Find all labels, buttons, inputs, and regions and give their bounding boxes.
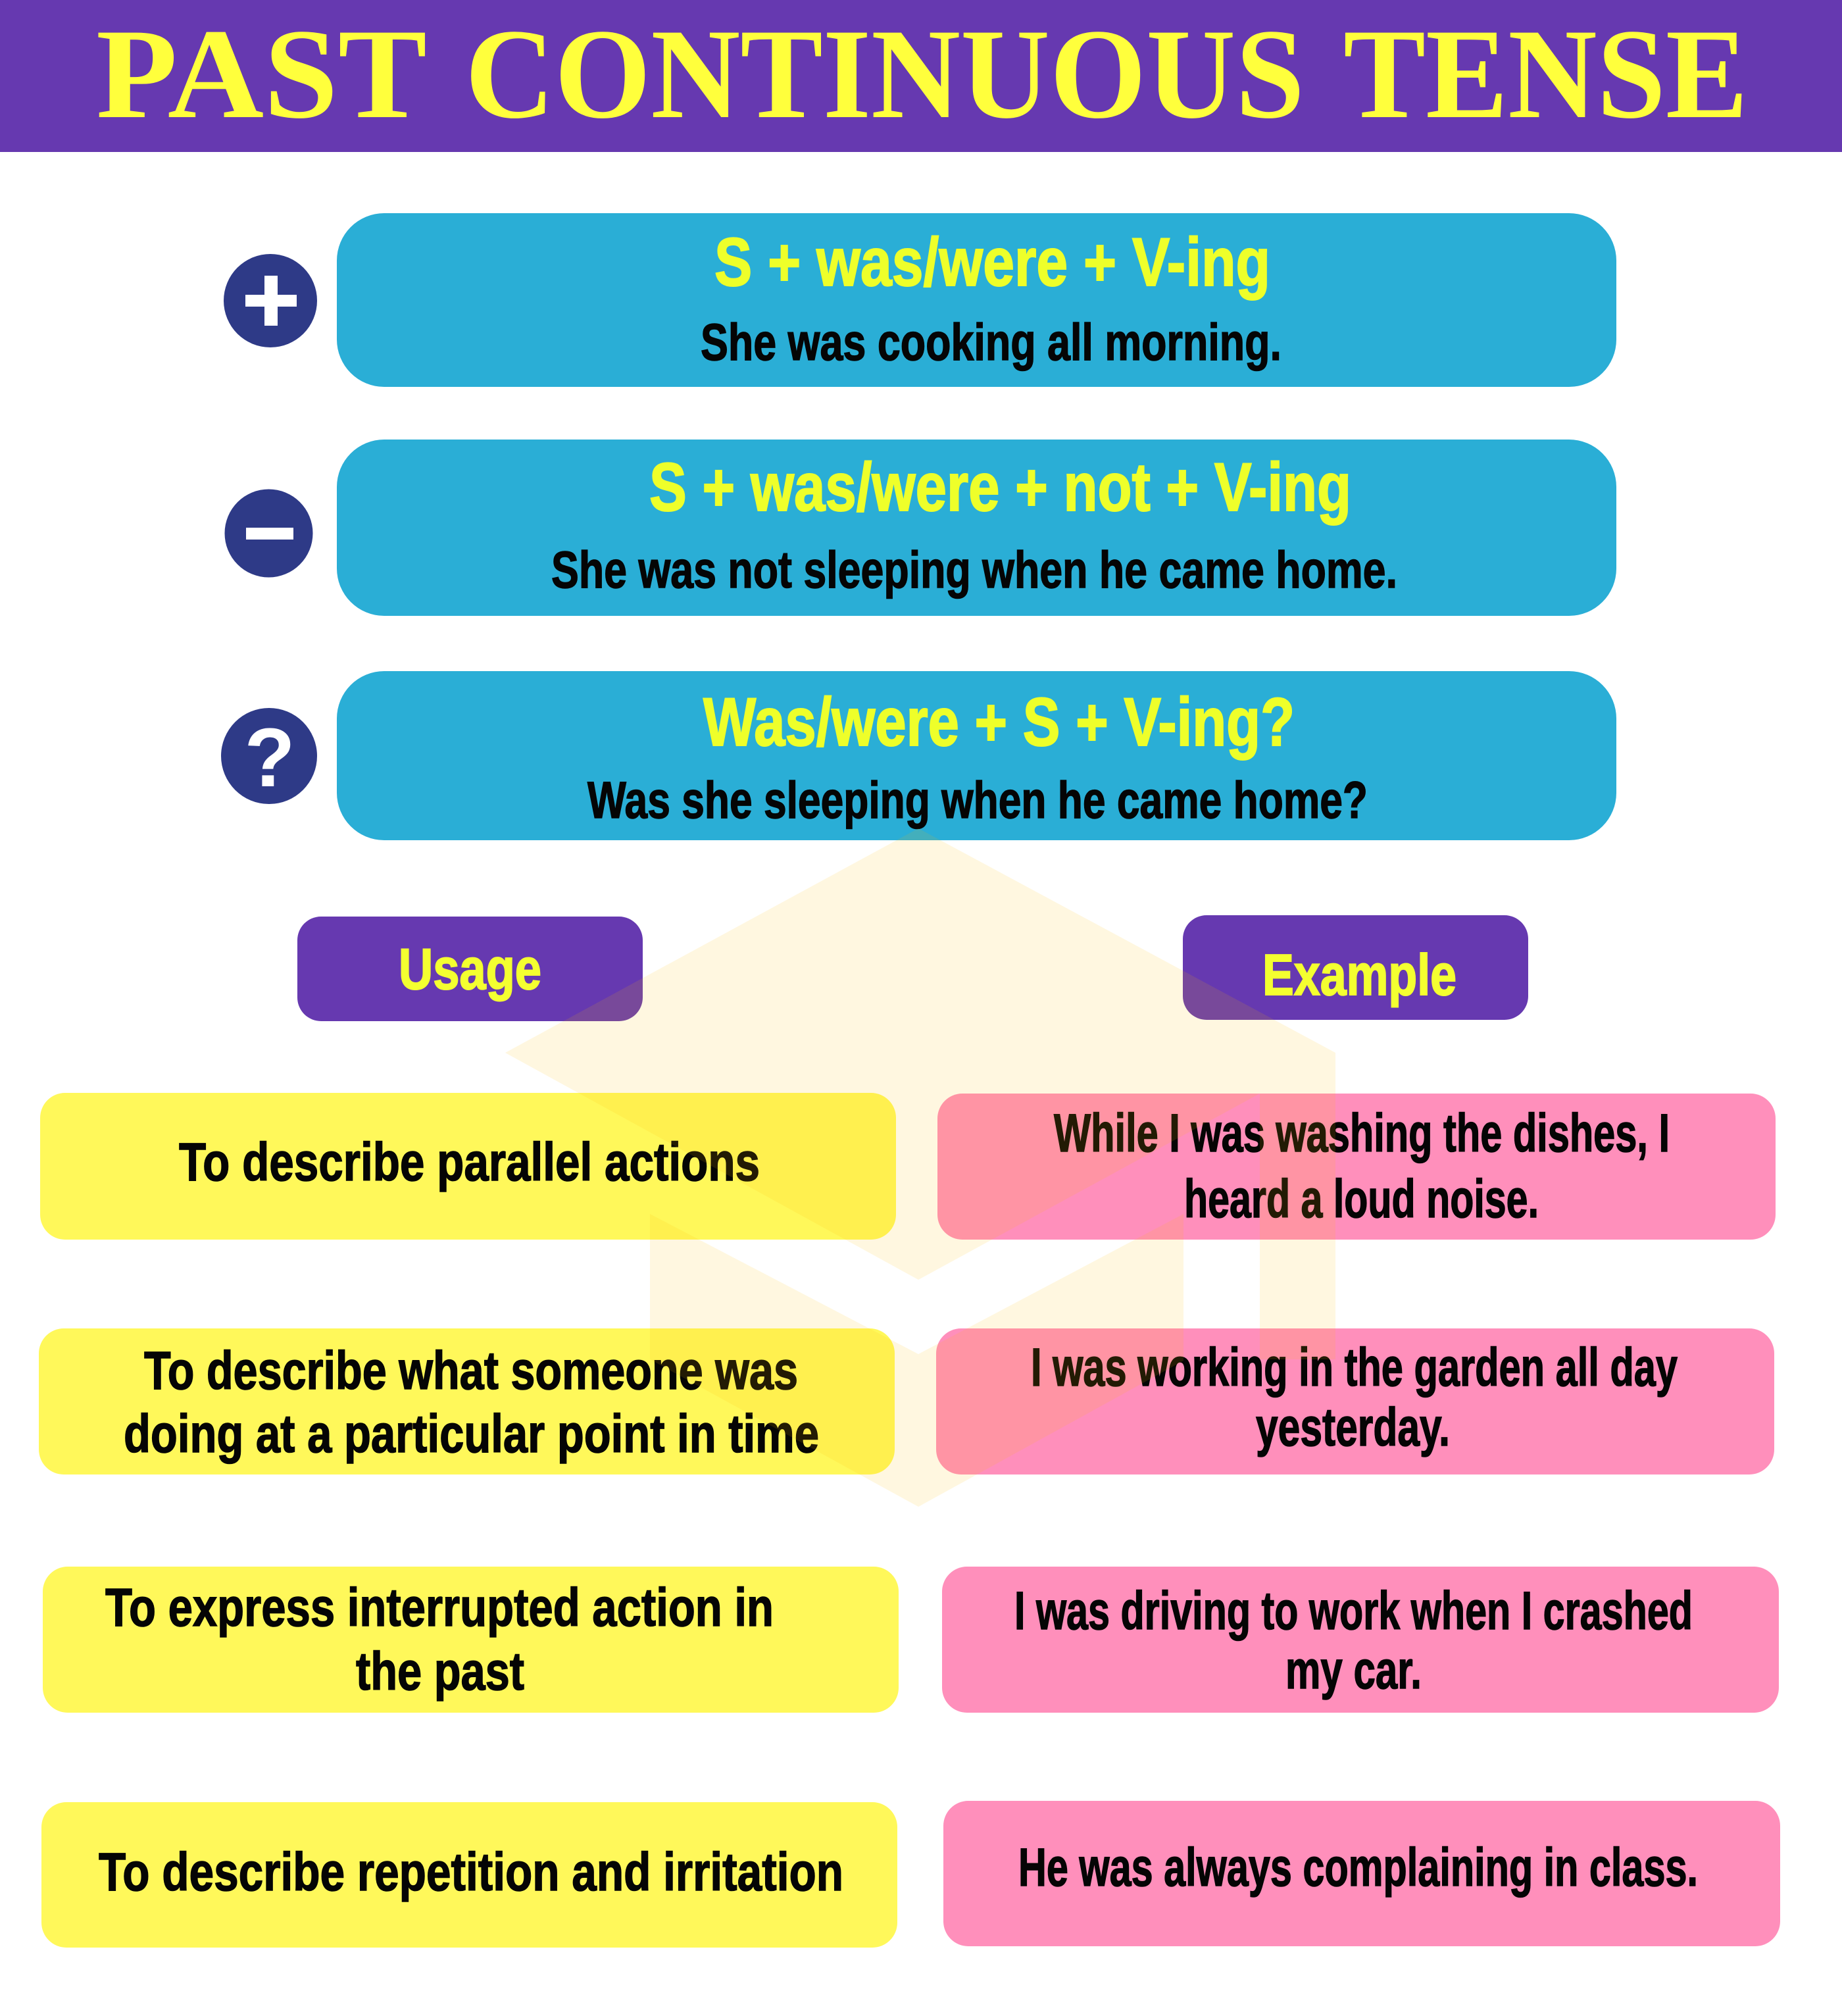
usage row 4: To describe repetition and irritation (99, 1842, 843, 1902)
panel: affirmative formula (337, 213, 1616, 387)
example row 4 (943, 1801, 1780, 1946)
panel: negative formula (337, 440, 1616, 616)
panel: negative formula: She was not sleeping when he came home. (551, 540, 1397, 599)
panel: negative formula: S + was/were + not + V-ing (649, 449, 1351, 526)
title: PAST (96, 3, 427, 145)
panel: question formula: Was she sleeping when he came home? (587, 770, 1368, 829)
usage row 2 (39, 1328, 895, 1474)
heading: example: Example (1262, 942, 1456, 1007)
heading: example (1183, 915, 1528, 1020)
icon: minus (225, 490, 313, 578)
usage row 2: To describe what someone was (144, 1341, 798, 1401)
title: TENSE (1343, 3, 1748, 145)
panel: affirmative formula: She was cooking all morning. (701, 313, 1282, 371)
usage row 3 (43, 1567, 899, 1713)
usage row 1: To describe parallel actions (179, 1132, 760, 1192)
example row 3: my car. (1285, 1640, 1422, 1700)
panel: affirmative formula: S + was/were + V-ing (714, 224, 1270, 301)
example row 1: heard a loud noise. (1184, 1169, 1539, 1229)
example row 2 (936, 1328, 1774, 1474)
usage row 4 (41, 1802, 897, 1948)
icon: plus (224, 254, 317, 347)
watermark: graduation cap logo (505, 828, 1335, 1507)
heading: usage: Usage (399, 936, 541, 1001)
usage row 1 (40, 1093, 896, 1240)
usage row 2: doing at a particular point in time (124, 1404, 819, 1464)
title (96, 3, 1748, 145)
title banner (0, 0, 1842, 152)
panel: question formula: Was/were + S + V-ing? (703, 684, 1295, 761)
icon: question mark: ? (245, 711, 295, 804)
usage row 3: To express interrupted action in (105, 1578, 774, 1638)
heading: usage (297, 917, 643, 1021)
usage row 3: the past (356, 1642, 524, 1701)
title: CONTINUOUS (465, 3, 1305, 145)
panel: question formula (337, 671, 1616, 840)
example row 2: yesterday. (1256, 1398, 1450, 1457)
icon: question mark (221, 708, 317, 804)
example row 1 (937, 1094, 1776, 1240)
example row 3 (942, 1567, 1779, 1713)
